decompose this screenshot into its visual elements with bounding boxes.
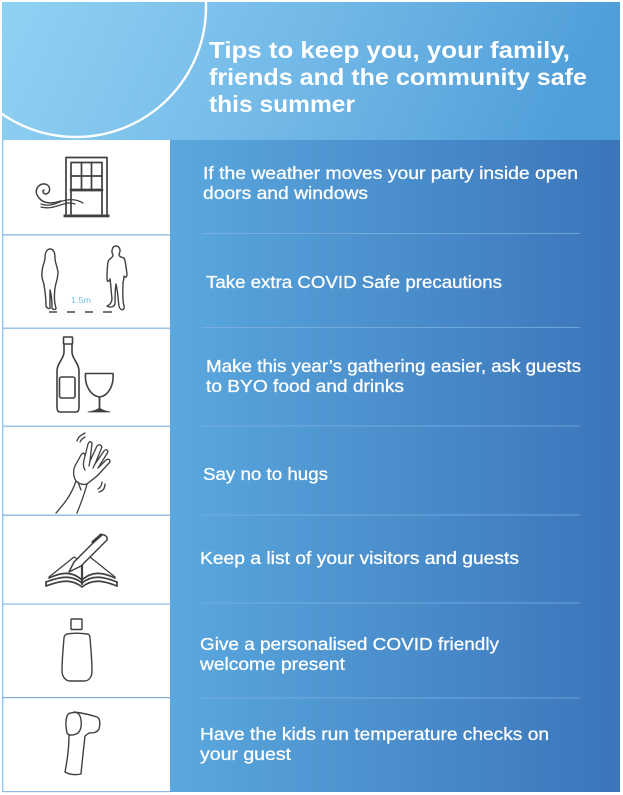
title xyxy=(209,37,587,117)
distance dashes xyxy=(49,311,112,313)
tip text: visitor list: Keep a list of your visitors and guests xyxy=(200,548,519,568)
tip text: BYO food and drinks: to BYO food and drinks xyxy=(206,376,404,396)
tip text: welcome present xyxy=(199,634,499,674)
tip text: no hugs: Say no to hugs xyxy=(203,464,328,484)
icon: two people 1.5m apart xyxy=(42,246,127,312)
header panel xyxy=(0,0,620,140)
tip text: open doors and windows: If the weather moves your party inside open xyxy=(203,163,578,183)
tip text: temperature checks xyxy=(200,724,549,764)
tip text: BYO food and drinks: Make this year’s gathering easier, ask guests xyxy=(206,356,581,376)
distance label: 1.5m xyxy=(71,295,91,305)
icon: bottle and glass xyxy=(57,337,113,412)
tip text: open doors and windows: doors and windows xyxy=(203,183,368,203)
tip text: welcome present: Give a personalised COVID friendly xyxy=(200,634,499,654)
title: this summer xyxy=(209,91,355,117)
title: friends and the community safe xyxy=(209,64,587,90)
panel: tips background xyxy=(170,140,620,792)
tip text: welcome present: welcome present xyxy=(199,654,345,674)
tip text: temperature checks: Have the kids run temperature checks on xyxy=(200,724,549,744)
tip text: temperature checks: your guest xyxy=(200,744,291,764)
tip text: open doors and windows xyxy=(203,163,578,203)
icon: raised hand xyxy=(56,433,110,513)
tip text: BYO food and drinks xyxy=(206,356,581,396)
icon: bottle gift xyxy=(62,619,92,681)
icon: infrared thermometer xyxy=(65,712,100,775)
title: Tips to keep you, your family, xyxy=(209,37,570,63)
divider lines xyxy=(202,234,580,698)
panel: icon column xyxy=(2,140,170,792)
icon: window with breeze xyxy=(36,158,110,217)
tip text: COVID Safe precautions: Take extra COVID Safe precautions xyxy=(206,272,502,292)
icon: open book with pen xyxy=(46,535,117,587)
decorative circle xyxy=(0,0,206,137)
